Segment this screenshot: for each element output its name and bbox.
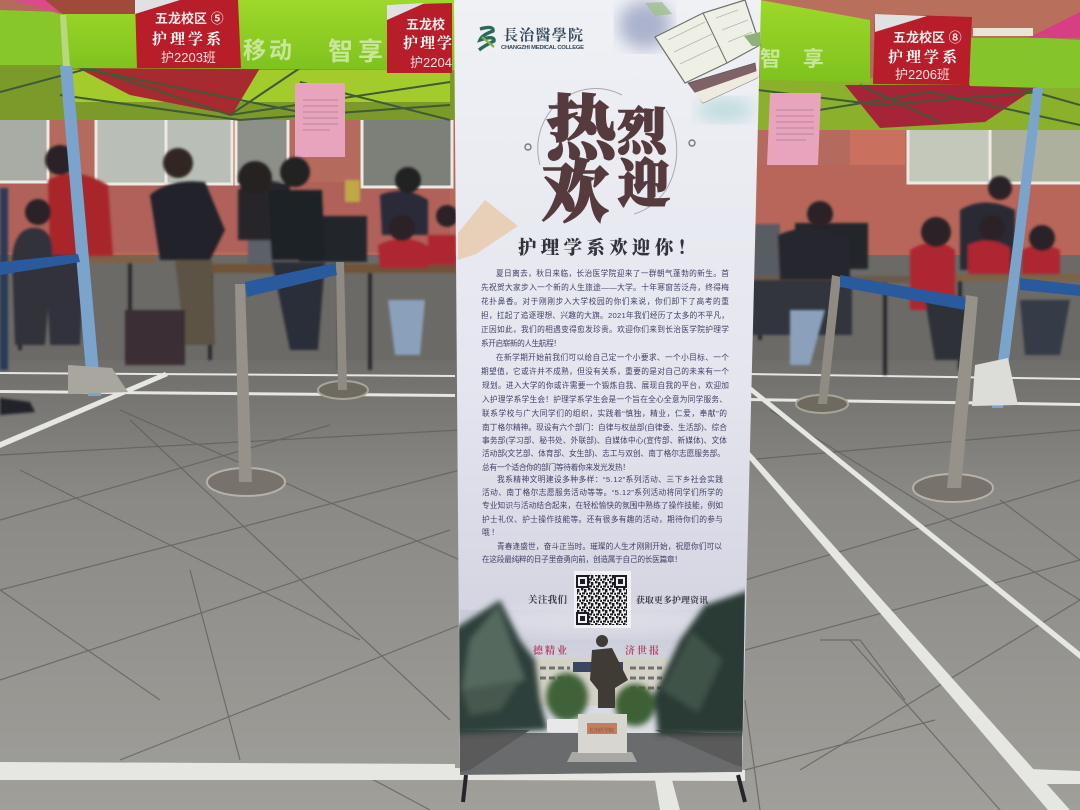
blue queue belts — [0, 254, 1080, 310]
body text: 先祝贺大家步入一个新的人生旅途——大学。十年寒窗苦泛舟，终得梅 — [481, 282, 729, 292]
sign: class 2206: 五龙校区 ⑧ — [893, 30, 962, 45]
people — [0, 145, 1070, 415]
college name: CHANGZHI MEDICAL COLLEGE — [501, 45, 584, 51]
tent canopy: right — [760, 0, 1080, 88]
sign: class 2206: 护2206班 — [895, 67, 950, 82]
person group: right — [778, 176, 1070, 365]
body text — [481, 268, 729, 564]
campus building: 济世报 — [625, 644, 661, 657]
body text: 在新学期开始前我们可以给自己定一个小要求、一个小目标、一个 — [496, 352, 729, 362]
QR caption right: 获取更多护理资讯 — [636, 594, 708, 605]
body text: 护士礼仪、护士操作技能等。还有很多有趣的活动，期待你们的参与 — [482, 514, 723, 524]
sign: class 2204: 护2204 — [410, 55, 452, 70]
body text: 花扑鼻香。对于刚刚步入大学校园的你们来说，你们卸下了高考的重 — [481, 296, 729, 306]
decorative ring — [538, 89, 677, 214]
sign: class 2206: 护理学系 — [888, 48, 960, 66]
body text: 系开启崭新的人生航程！ — [481, 338, 561, 348]
headline: warm welcome: 迎 — [618, 156, 670, 214]
QR caption left: 关注我们 — [528, 594, 567, 606]
pink poster right — [767, 93, 821, 165]
sign: class 2206 — [873, 14, 972, 85]
pine trees — [450, 590, 750, 735]
body text: 正因如此，我们的相遇变得愈发珍贵。欢迎你们来到长治医学院护理学 — [481, 324, 729, 334]
stanchion 3 — [796, 275, 848, 413]
sign: class 2204: 五龙校 — [406, 17, 445, 32]
body text: 规划。进入大学的你或许需要一个锻炼自我、展现自我的平台，欢迎加 — [482, 380, 729, 390]
pink poster left — [295, 83, 345, 157]
body text: 青春逢盛世，奋斗正当时。璀璨的人生才刚刚开始，祝愿你们可以 — [497, 541, 722, 551]
sign: class 2204: 护理学 — [403, 34, 454, 52]
ground paving — [0, 255, 1080, 810]
body text: 入护理学系学生会！护理学系学生会是一个旨在全心全意为同学服务、 — [482, 394, 727, 404]
windows — [0, 112, 1080, 187]
subtitle: 护理学系欢迎你！ — [518, 237, 696, 259]
campus building — [533, 644, 668, 706]
body text: 南丁格尔精神。现设有六个部门：自律与权益部(自律委、生活部)、综合 — [482, 422, 727, 432]
sign: class 2203 — [135, 0, 241, 68]
tent pole left — [60, 15, 128, 396]
pedestal — [567, 714, 637, 762]
body text: 我系精神文明建设多种多样：“5.12”系列活动、三下乡社会实践 — [497, 474, 723, 484]
tent canopy: right: 智 享 — [760, 48, 832, 71]
headline: warm welcome: 欢 — [541, 155, 609, 231]
headline: warm welcome: 烈 — [617, 104, 671, 160]
sign: class 2204 — [387, 3, 454, 73]
road — [460, 733, 742, 775]
headline: warm welcome — [541, 92, 671, 231]
body text: 期望值，它或许并不成熟，但没有关系，重要的是对自己的未来有一个 — [481, 366, 729, 376]
watercolour behind book — [619, 1, 671, 49]
body text: 活动部(文艺部、体育部、女生部)、志工与双创、南丁格尔志愿服务部。 — [482, 448, 725, 458]
tent underside: left — [0, 60, 455, 120]
pedestal: 长治医学院 — [589, 727, 614, 734]
tent canopy: left: 智享 — [328, 38, 388, 66]
stanchion 2 — [318, 262, 368, 399]
sign: class 2203: 护2203班 — [161, 50, 216, 65]
person group: left — [0, 145, 225, 415]
body text: 事务部(学习部、秘书处、外联部)、自媒体中心(宣传部、新媒体)、文体 — [482, 435, 727, 445]
statue — [590, 635, 628, 708]
campus building: 德精业 — [533, 644, 569, 657]
bus — [547, 719, 579, 732]
QR code — [574, 571, 631, 628]
icon: paper book corner — [458, 200, 518, 260]
body text: 哦！ — [482, 527, 499, 537]
body text: 总有一个适合你的部门等待着你来发光发热！ — [482, 462, 630, 472]
stanchion 4 — [913, 295, 993, 502]
canopy slogan: 移动 — [243, 37, 295, 63]
headline: warm welcome: 热 — [546, 92, 623, 169]
registration desks and computers — [0, 214, 1080, 375]
tent underside: right — [758, 78, 1080, 130]
background: building wall — [0, 0, 1080, 380]
person group: centre — [238, 157, 458, 355]
body text: 夏日离去，秋日来临，长治医学院迎来了一群朝气蓬勃的新生。首 — [496, 268, 729, 278]
icon: college logo — [479, 27, 494, 50]
banner stand feet — [463, 775, 745, 802]
stanchion 1 — [207, 284, 285, 496]
white court lines — [0, 372, 1080, 810]
body text: 专业知识与活动结合起来，在轻松愉快的氛围中熟练了操作技能，例如 — [482, 500, 723, 510]
campus photo — [450, 590, 750, 775]
body text: 活动、南丁格尔志愿服务活动等等。“5.12”系列活动将同学们所学的 — [482, 487, 723, 497]
icon: open books — [645, 0, 760, 103]
banner panel — [450, 0, 761, 775]
body text: 联系学校与广大同学们的组织，实践着“慎独，精业，仁爱，奉献”的 — [482, 408, 727, 418]
tent pole right — [972, 88, 1043, 408]
sign: class 2203: 五龙校区 ⑤ — [155, 11, 224, 26]
college name — [501, 26, 584, 51]
body text: 担，扛起了追逐理想、兴趣的大旗。2021年我们经历了太多的不平凡， — [481, 310, 729, 320]
sign: class 2203: 护理学系 — [152, 30, 224, 48]
college name: 長治醫學院 — [503, 26, 583, 44]
body text: 在这段最纯粹的日子里奋勇向前，创造属于自己的长医篇章！ — [482, 554, 682, 564]
tent canopy: left — [0, 0, 455, 70]
